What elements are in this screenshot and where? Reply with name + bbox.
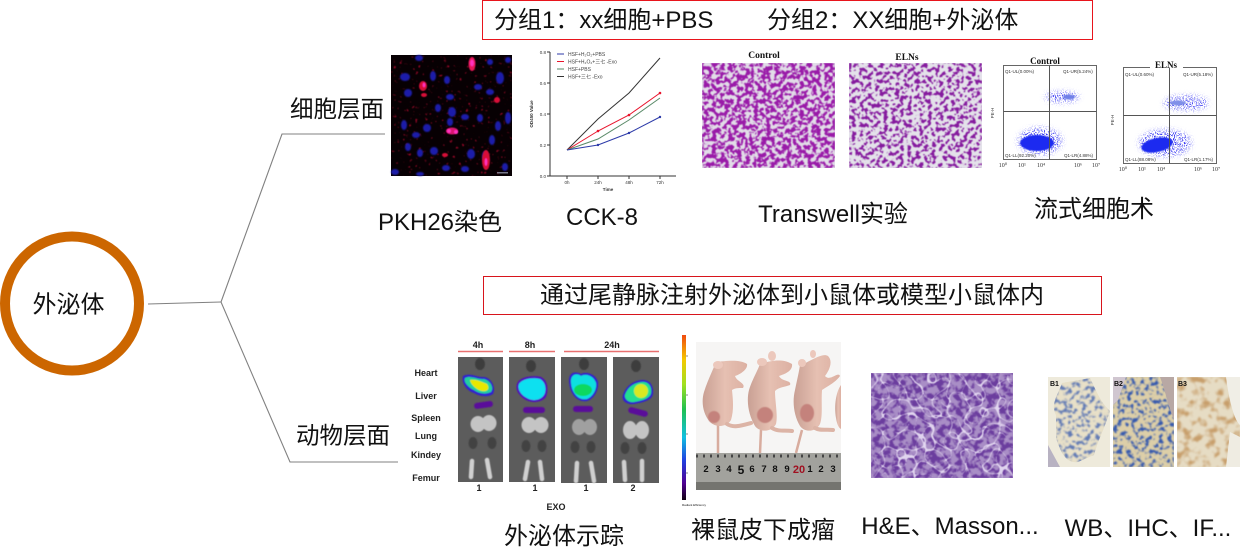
ruler: 7 [761,464,767,475]
panel: CCK-8 line chart: HSF+三七 -Exo [568,74,603,80]
panel: CCK-8 line chart: 0h [564,180,570,185]
ruler: 3 [830,464,836,475]
time headers: 4h [473,340,483,350]
panel: flow cytometry control plot: 10⁷ [1092,163,1100,169]
organ labels: Spleen [411,413,441,423]
panel: CCK-8 line chart: 0.4 [540,112,546,117]
panel: IHC tissue sections: B2 [1114,381,1123,388]
label: exosome tracing: 外泌体示踪 [504,523,624,550]
panel: flow cytometry ELNs plot: PE-H [1110,115,1115,125]
panel: flow cytometry ELNs plot: 10⁴ [1157,167,1165,173]
group numbers: EXO [546,502,566,512]
callout: cell groups: 分组2：XX细胞+外泌体 [767,7,1018,34]
group numbers: 1 [532,483,538,493]
panel: CCK-8 line chart: OD450 Value [529,100,534,128]
panel: flow cytometry control plot: Q1-UR(5.24%) [1063,69,1093,74]
panel: flow cytometry control plot: PE-H [990,108,995,118]
panel: CCK-8 line chart: 24h [594,180,602,185]
panel: CCK-8 line chart: HSF+H₂O₂+三七 -Exo [568,58,617,66]
ruler: 1 [807,464,813,475]
panel: CCK-8 line chart: 72h [656,180,664,185]
label: WB IHC IF: WB、IHC、IF... [1065,515,1231,542]
ruler [696,453,841,490]
ruler: 2 [703,464,709,475]
panel: flow cytometry control plot: Q1-LL(92.20%) [1005,153,1036,158]
ruler: 9 [784,464,790,475]
callout: cell groups [482,0,1092,40]
panel: Transwell control image: Control [748,51,780,61]
label: nude mouse tumour: 裸鼠皮下成瘤 [691,517,835,544]
label: flow cytometry: 流式细胞术 [1034,196,1154,223]
panel: flow cytometry ELNs plot [1110,60,1220,173]
panel: H&E tissue section [871,373,1013,478]
organ labels: Liver [415,391,437,401]
label: PKH26: PKH26染色 [378,209,502,236]
panel: Transwell ELNs image: ELNs [895,53,919,63]
group numbers: 1 [583,483,589,493]
panel: Transwell ELNs image [849,53,982,168]
panel: flow cytometry control plot: Control [1030,56,1060,66]
organ labels: Heart [414,368,438,378]
callout: tail vein injection [484,276,1102,314]
ruler: 4 [726,464,732,475]
time headers [458,340,659,352]
label: H&E Masson: H&E、Masson... [861,513,1039,540]
label: CCK-8: CCK-8 [566,204,638,231]
kidneys [468,437,646,454]
heading: animal level: 动物层面 [296,422,390,448]
ears [713,350,816,369]
panel: flow cytometry control plot: 10¹ [1018,163,1026,169]
panel: CCK-8 line chart: 0.2 [540,143,546,148]
panel: flow cytometry control plot: 10⁶ [1074,163,1082,169]
ruler: 3 [715,464,721,475]
ruler: 6 [749,464,755,475]
label: Transwell: Transwell实验 [758,201,908,228]
organ labels: Femur [412,473,440,483]
panel: CCK-8 line chart: HSF+H₂O₂+PBS [568,52,606,58]
panel: PKH26 staining micrograph [391,55,512,176]
tumours [708,404,814,423]
organ labels: Kindey [411,450,441,460]
panel: flow cytometry ELNs plot: 10⁶ [1194,167,1202,173]
panel: CCK-8 line chart: 0.6 [540,81,546,86]
panel: IHC tissue sections [1048,377,1240,467]
ruler: 20 [793,464,805,476]
panel: IHC tissue sections: B1 [1050,381,1059,388]
hearts [475,358,641,372]
panel: flow cytometry ELNs plot: Q1-UR(5.18%) [1183,72,1213,77]
panel: nude mouse tumour photo [696,342,841,490]
panel: Transwell control image [702,51,835,168]
panel: flow cytometry ELNs plot: Q1-UL(0.60%) [1125,72,1155,77]
color scale bar [682,335,706,507]
panel: flow cytometry ELNs plot: Q1-LL(88.08%) [1125,157,1156,162]
panel: flow cytometry ELNs plot: 10¹ [1138,167,1146,173]
tails [718,425,802,453]
panel: CCK-8 line chart [529,50,676,192]
ruler: 8 [772,464,778,475]
panel: CCK-8 line chart: 0.0 [540,174,546,179]
time headers: 24h [604,340,620,350]
panel: flow cytometry ELNs plot: ELNs [1155,60,1177,70]
organ labels [411,368,441,483]
panel: flow cytometry control plot: 10⁴ [1037,163,1045,169]
panel: flow cytometry control plot: Q1-LR(4.88%) [1064,153,1094,158]
panel: CCK-8 line chart: 48h [625,180,633,185]
panel: flow cytometry ELNs plot: Q1-LR(1.17%) [1184,157,1214,162]
panel: flow cytometry ELNs plot: 10⁷ [1212,167,1220,173]
panel: flow cytometry ELNs plot: 10⁰ [1119,166,1128,173]
organ labels: Lung [415,431,437,441]
panel: CCK-8 line chart: 0.8 [540,50,546,55]
central node: exosome circle [5,236,139,370]
hind feet [727,423,833,431]
connector lines [148,134,398,462]
central node: exosome circle: 外泌体 [32,292,104,318]
panel: flow cytometry control plot [990,56,1100,169]
lungs [470,415,649,439]
imaging strips [458,357,659,483]
group numbers: 2 [630,483,636,493]
ruler: 2 [818,464,824,475]
panel: IHC tissue sections: B3 [1178,381,1187,388]
group numbers [476,483,636,512]
color scale bar: Radiant Efficiency [682,503,706,507]
heading: cell level: 细胞层面 [290,96,384,122]
callout: cell groups: 分组1：xx细胞+PBS [494,7,713,34]
group numbers: 1 [476,483,482,493]
panel: CCK-8 line chart: Time [603,187,614,192]
panel: flow cytometry control plot: 10⁰ [999,162,1008,169]
panel: exosome tracing organ imaging [411,340,659,512]
ruler: 5 [738,463,745,477]
mouse bodies [703,355,841,431]
time headers: 8h [525,340,535,350]
femurs [471,460,642,481]
panel: CCK-8 line chart: HSF+PBS [568,67,592,73]
liver signals [463,372,653,404]
spleens [474,401,648,417]
panel: flow cytometry control plot: Q1-UL(0.00%) [1005,69,1035,74]
callout: tail vein injection: 通过尾静脉注射外泌体到小鼠体或模型小鼠体内 [540,282,1044,309]
